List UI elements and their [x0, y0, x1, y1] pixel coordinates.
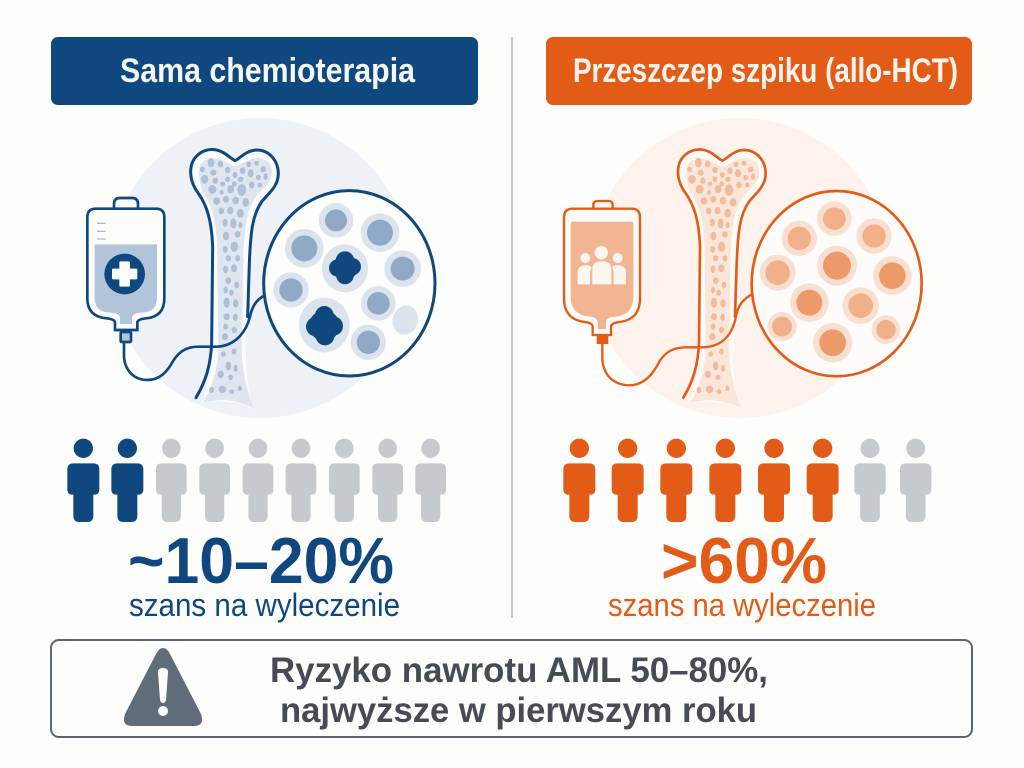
icon: IV bag [87, 198, 164, 342]
illustration: chemotherapy [87, 118, 435, 418]
magnified healthy cells [752, 191, 922, 376]
icon: warning triangle [124, 648, 202, 726]
statistic: transplant: >60% [661, 524, 827, 597]
statistic: chemotherapy: szans na wyleczenie [129, 587, 400, 623]
heading: chemotherapy [51, 37, 478, 105]
icon: bone [191, 150, 278, 409]
central divider [511, 37, 513, 618]
pictogram: left patients, 2 of 9 [67, 439, 446, 522]
statistic: transplant: szans na wyleczenie [608, 587, 876, 623]
callout text: Ryzyko nawrotu AML 50–80%, [270, 651, 768, 690]
statistic: chemotherapy: ~10–20% [128, 524, 394, 597]
statistic: transplant [608, 524, 876, 623]
callout text: najwyższe w pierwszym roku [280, 691, 757, 730]
tube [124, 296, 264, 380]
pictogram: right patients, 6 of 8 [563, 439, 931, 522]
callout text [270, 651, 768, 730]
callout: relapse risk [51, 640, 972, 737]
heading: chemotherapy: Sama chemioterapia [120, 52, 416, 90]
illustration: transplant [564, 118, 922, 418]
donor tube [602, 295, 751, 385]
icon: donor bone [678, 150, 766, 409]
magnified marrow cells [264, 191, 435, 376]
icon: donor IV bag [564, 201, 640, 344]
heading: transplant [546, 37, 972, 105]
